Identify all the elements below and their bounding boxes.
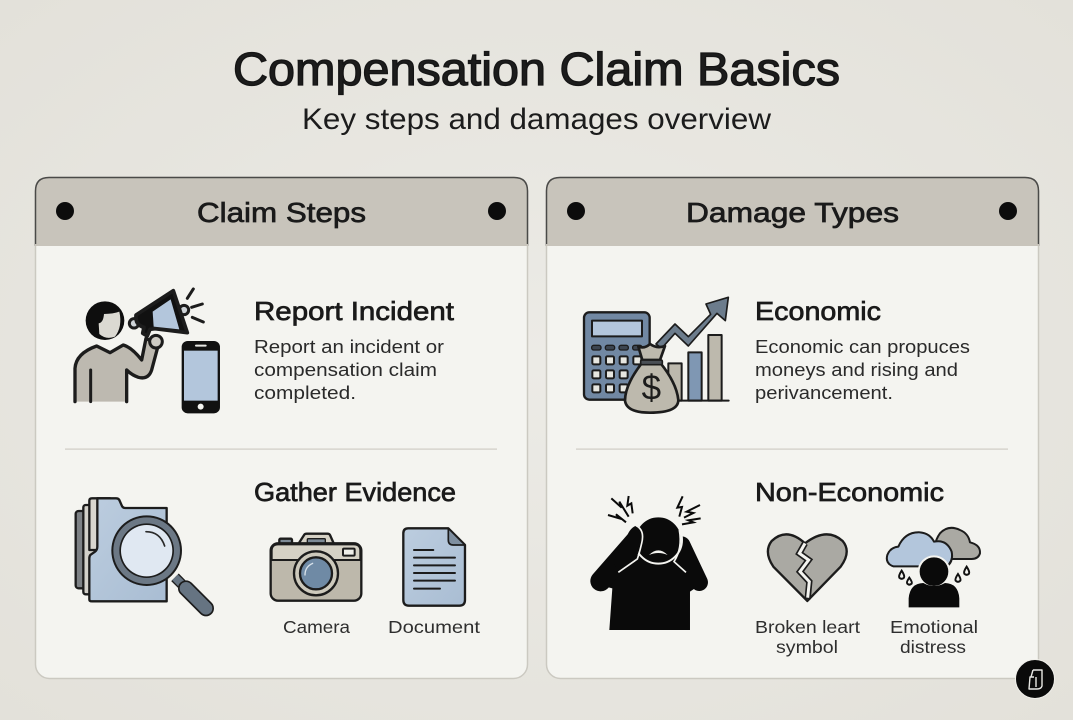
label: broken heart symbol: symbol xyxy=(776,637,838,657)
panel header: claim steps xyxy=(35,178,528,246)
icon: emotional distress with clouds xyxy=(887,528,980,607)
text: report description: completed. xyxy=(254,382,356,403)
icon: calculator, money bag and growth chart xyxy=(584,297,729,413)
heading: economic: Economic xyxy=(755,296,881,326)
text: economic description xyxy=(755,336,970,403)
icon: person with megaphone and phone xyxy=(75,289,220,413)
panel header: claim steps: Claim Steps xyxy=(197,197,366,228)
panel: claim steps xyxy=(35,178,528,678)
icon: distressed person xyxy=(600,496,701,630)
heading: gather evidence: Gather Evidence xyxy=(254,477,456,507)
label: emotional distress: distress xyxy=(900,637,966,657)
label: camera: Camera xyxy=(283,617,350,637)
label: emotional distress: Emotional xyxy=(890,617,978,637)
text: report description xyxy=(254,336,444,403)
text: economic description: moneys and rising and xyxy=(755,359,958,380)
text: economic description: perivancement. xyxy=(755,382,893,403)
text: report description: Report an incident or xyxy=(254,336,444,357)
title: Compensation Claim Basics xyxy=(233,43,840,95)
panel header: damage types: Damage Types xyxy=(686,197,899,228)
heading: non-economic: Non-Economic xyxy=(755,477,944,507)
heading: report incident: Report Incident xyxy=(254,296,455,326)
icon: logo badge xyxy=(1016,660,1054,698)
label: broken heart symbol xyxy=(755,617,860,657)
icon: folder and magnifying glass xyxy=(76,498,206,608)
label: document: Document xyxy=(388,617,480,637)
subtitle: Key steps and damages overview xyxy=(302,103,771,136)
text: report description: compensation claim xyxy=(254,359,437,380)
icon: camera xyxy=(271,534,361,601)
label: broken heart symbol: Broken leart xyxy=(755,617,860,637)
icon: document xyxy=(403,528,465,606)
label: emotional distress xyxy=(890,617,978,657)
panel: damage types xyxy=(546,178,1039,678)
text: economic description: Economic can propuces xyxy=(755,336,970,357)
icon: broken heart xyxy=(768,534,847,601)
panel header: damage types xyxy=(546,178,1039,246)
icon: calculator, money bag and growth chart: $ xyxy=(642,369,661,408)
